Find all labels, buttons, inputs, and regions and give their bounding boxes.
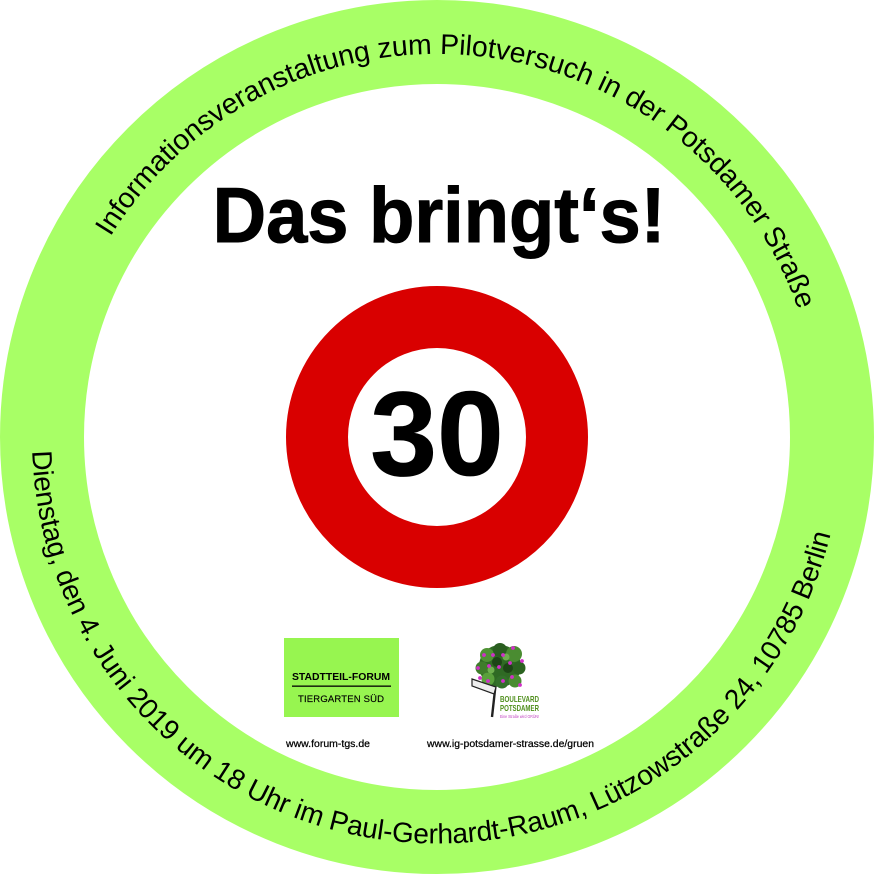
icon: tree pole bbox=[492, 681, 496, 717]
logo: Boulevard Potsdamer: Eine Straße wird GRÜN! bbox=[500, 713, 539, 719]
icon: tree crown bbox=[476, 643, 526, 688]
logo: Boulevard Potsdamer bbox=[472, 643, 539, 719]
bottom ring text: Dienstag, den 4. Juni 2019 um 18 Uhr im Paul-Gerhardt-Raum, Lützowstraße 24, 10785 Berlin bbox=[32, 452, 830, 844]
logo: Stadtteil-Forum: STADTTEIL-FORUM bbox=[292, 672, 390, 683]
logo: Boulevard Potsdamer: POTSDAMER bbox=[500, 703, 539, 713]
logo: Stadtteil-Forum: TIERGARTEN SÜD bbox=[298, 694, 384, 705]
top ring text: Informationsveranstaltung zum Pilotversuch in der Potsdamer Straße bbox=[95, 34, 810, 308]
link: forum-tgs: www.forum-tgs.de bbox=[285, 738, 370, 750]
speed limit sign bbox=[317, 317, 557, 557]
title: Das bringt‘s! bbox=[213, 172, 665, 259]
logo: Stadtteil-Forum bbox=[284, 638, 399, 717]
red ring bbox=[317, 317, 557, 557]
logo text: BOULEVARD bbox=[500, 694, 539, 704]
speed number: 30 bbox=[370, 367, 504, 501]
link: ig-potsdamer-strasse: www.ig-potsdamer-strasse.de/gruen bbox=[426, 738, 594, 750]
icon: street sign bbox=[472, 679, 496, 694]
